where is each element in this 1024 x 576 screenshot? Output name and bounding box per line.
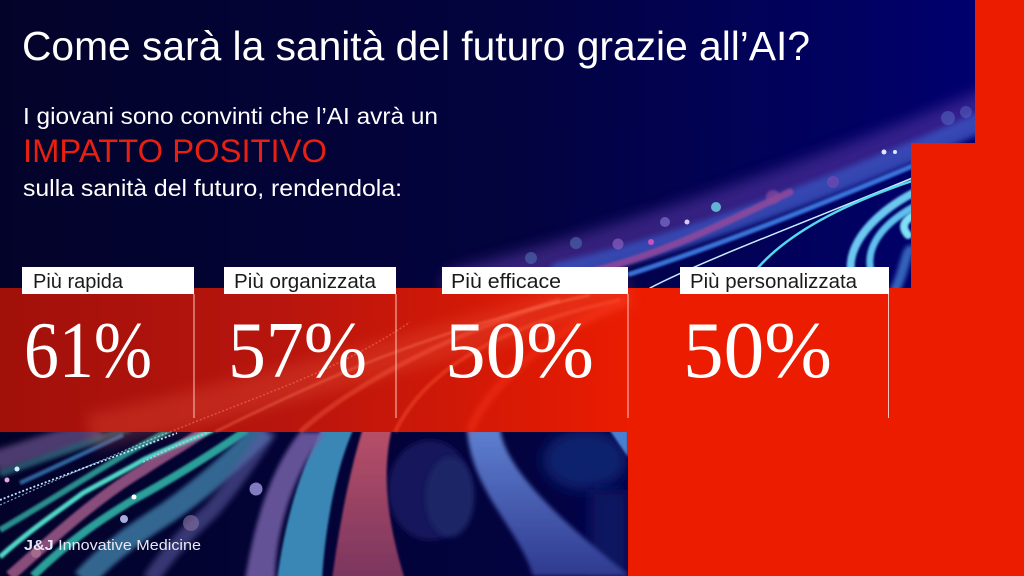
divider	[194, 294, 195, 418]
label text: Più organizzata	[234, 271, 377, 293]
intro text block	[23, 103, 438, 201]
background light streaks, lower section	[0, 428, 630, 576]
translucent red band	[0, 288, 628, 432]
background light streaks, upper right	[460, 105, 990, 290]
left haze	[0, 428, 100, 462]
intro line 3: sulla sanità del futuro, rendendola:	[23, 175, 402, 201]
divider	[396, 294, 397, 418]
divider	[888, 294, 889, 418]
background sparkle dots, lower section	[4, 466, 262, 558]
value: 50%	[445, 307, 594, 395]
label text: Più personalizzata	[690, 271, 858, 293]
value: 61%	[24, 307, 152, 395]
label box	[22, 267, 194, 294]
teal lines and dotted lines	[0, 430, 170, 530]
dark blobs	[388, 440, 472, 540]
label box	[680, 267, 889, 294]
stat column: più rapida	[22, 267, 194, 418]
highlight: impatto positivo: IMPATTO POSITIVO	[23, 133, 327, 169]
label box	[224, 267, 396, 294]
footer logo text: J&J Innovative Medicine	[24, 537, 201, 554]
red solid stepped shape	[628, 0, 1024, 576]
title: Come sarà la sanità del futuro grazie all’AI?	[22, 23, 810, 69]
stat column: più organizzata	[224, 267, 396, 418]
stat column: più efficace	[442, 267, 628, 418]
divider	[628, 294, 629, 418]
stat column: più personalizzata	[680, 267, 889, 418]
streaks showing through the red band	[90, 288, 628, 432]
intro line 1: I giovani sono convinti che l’AI avrà un	[23, 103, 438, 129]
blue purple sweep	[277, 428, 354, 576]
background sparkle dots, upper right	[525, 106, 972, 264]
label text: Più efficace	[451, 271, 561, 293]
label text: Più rapida	[33, 271, 124, 293]
value: 57%	[228, 307, 367, 395]
pink sweep	[332, 428, 405, 576]
label box	[442, 267, 628, 294]
blue sweep	[467, 428, 630, 576]
value: 50%	[683, 307, 832, 395]
